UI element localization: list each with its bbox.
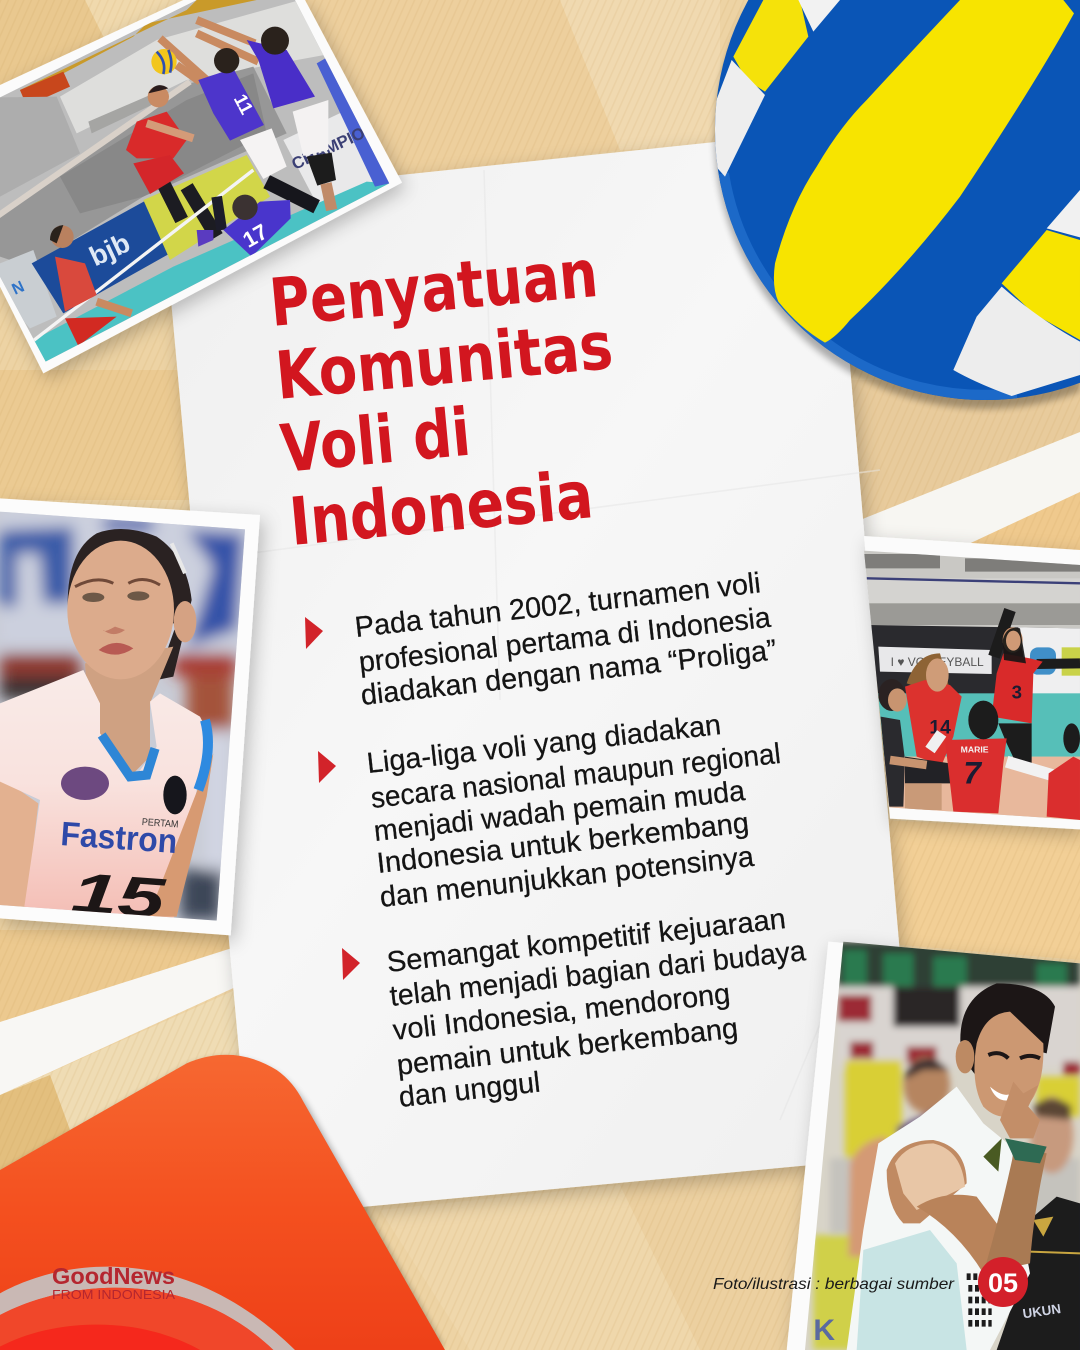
jersey	[847, 1087, 1030, 1350]
player 7	[930, 701, 1063, 813]
text block 3: Semangat kompetitif kejuaraan	[385, 903, 787, 979]
badge and trim	[983, 1138, 1002, 1172]
ball rim	[723, 173, 1017, 395]
photo: male player smiling	[784, 939, 1080, 1350]
text block 1	[353, 567, 778, 712]
title	[266, 235, 616, 561]
title: Indonesia	[286, 456, 596, 561]
volleyball	[700, 0, 1080, 420]
text block 3: dan unggul	[397, 1067, 542, 1114]
photo: male player smiling: UKUN	[1022, 1301, 1062, 1321]
blue player 17: 17	[238, 219, 272, 253]
source credit: Foto/ilustrasi : berbagai sumber	[713, 1276, 955, 1293]
text block 3	[385, 903, 808, 1114]
player 14	[905, 653, 962, 810]
photo: female player portrait: 15	[69, 862, 169, 931]
yellow main stripe	[774, 0, 1074, 343]
text block 2: secara nasional maupun regional	[369, 738, 782, 815]
net tape upper	[0, 82, 190, 217]
head	[960, 983, 1055, 1077]
photo: female player portrait: PERTAM	[141, 817, 179, 831]
ball	[151, 49, 177, 74]
blue blocker back	[197, 20, 336, 210]
jersey badges	[61, 767, 109, 800]
text block 2: Indonesia untuk berkembang	[375, 807, 751, 880]
hair	[68, 529, 192, 680]
photo: volleyball block at the net: CHAMPIO	[289, 123, 368, 174]
player 14: 14	[929, 717, 951, 738]
photo: team celebrating	[850, 530, 1080, 829]
page number badge: 05	[988, 1268, 1018, 1298]
title: Voli di	[277, 394, 474, 488]
icon: bullet arrow 3	[342, 948, 360, 980]
jersey text: Fastron	[59, 815, 178, 861]
player 3: 3	[1012, 681, 1022, 702]
photo: volleyball block at the net: N	[10, 278, 27, 299]
player 7: 7	[963, 754, 982, 790]
player 3	[992, 610, 1080, 772]
blue blocker front	[160, 38, 317, 207]
page number badge	[978, 1257, 1028, 1307]
text block 2: Liga-liga voli yang diadakan	[365, 709, 723, 780]
shoulder and arm	[887, 1140, 967, 1223]
left arm	[0, 777, 38, 910]
text block 3: telah menjadi bagian dari budaya	[388, 935, 808, 1013]
title: Komunitas	[272, 307, 616, 415]
text block 1: profesional pertama di Indonesia	[357, 602, 773, 679]
icon: bullet arrow 1	[305, 617, 323, 649]
text block 3: pemain untuk berkembang	[395, 1013, 740, 1082]
player 7: MARIE	[961, 745, 989, 755]
text block 3: voli Indonesia, mendorong	[391, 978, 732, 1047]
text block 1: diadakan dengan nama “Proliga”	[359, 634, 778, 712]
text block 2: dan menunjukkan potensinya	[378, 841, 756, 914]
player right	[1047, 723, 1080, 820]
bullet point 3	[342, 903, 808, 1114]
traffic cone	[0, 1040, 445, 1350]
text block 1: Pada tahun 2002, turnamen voli	[353, 567, 762, 644]
red player left	[50, 225, 132, 346]
blue blocker front: 11	[230, 90, 258, 118]
neck	[85, 647, 173, 773]
text block 2: menjadi wadah pemain muda	[372, 775, 747, 848]
referee	[997, 1197, 1080, 1350]
photo: volleyball block at the net	[0, 0, 402, 373]
bullet point 1	[305, 567, 778, 712]
icon: bullet arrow 2	[318, 751, 336, 783]
collar	[102, 735, 155, 777]
logo: GoodNews	[52, 1263, 176, 1302]
hair clip	[172, 543, 185, 573]
bullet point 2	[318, 709, 782, 914]
white panels	[798, 0, 840, 32]
hand	[1000, 1082, 1040, 1138]
photo: male player smiling: K	[813, 1314, 835, 1347]
right arm	[148, 753, 213, 917]
red attacker	[126, 85, 217, 247]
logo: GoodNews: GoodNews	[52, 1263, 175, 1289]
bjb banner text: bjb	[84, 227, 135, 272]
player left	[878, 679, 927, 807]
title: Penyatuan	[266, 235, 601, 342]
paper sheet	[162, 130, 917, 1217]
face	[67, 541, 174, 679]
text block 2	[365, 709, 782, 914]
blue player 17	[217, 195, 291, 257]
yellow top-left panel	[733, 0, 808, 92]
logo: GoodNews: FROM INDONESIA	[52, 1288, 176, 1302]
jersey	[0, 670, 213, 920]
net tape lower	[33, 170, 253, 341]
banner text: I ♥ VOLLEYBALL	[891, 655, 984, 669]
photo: female player portrait	[0, 490, 260, 935]
